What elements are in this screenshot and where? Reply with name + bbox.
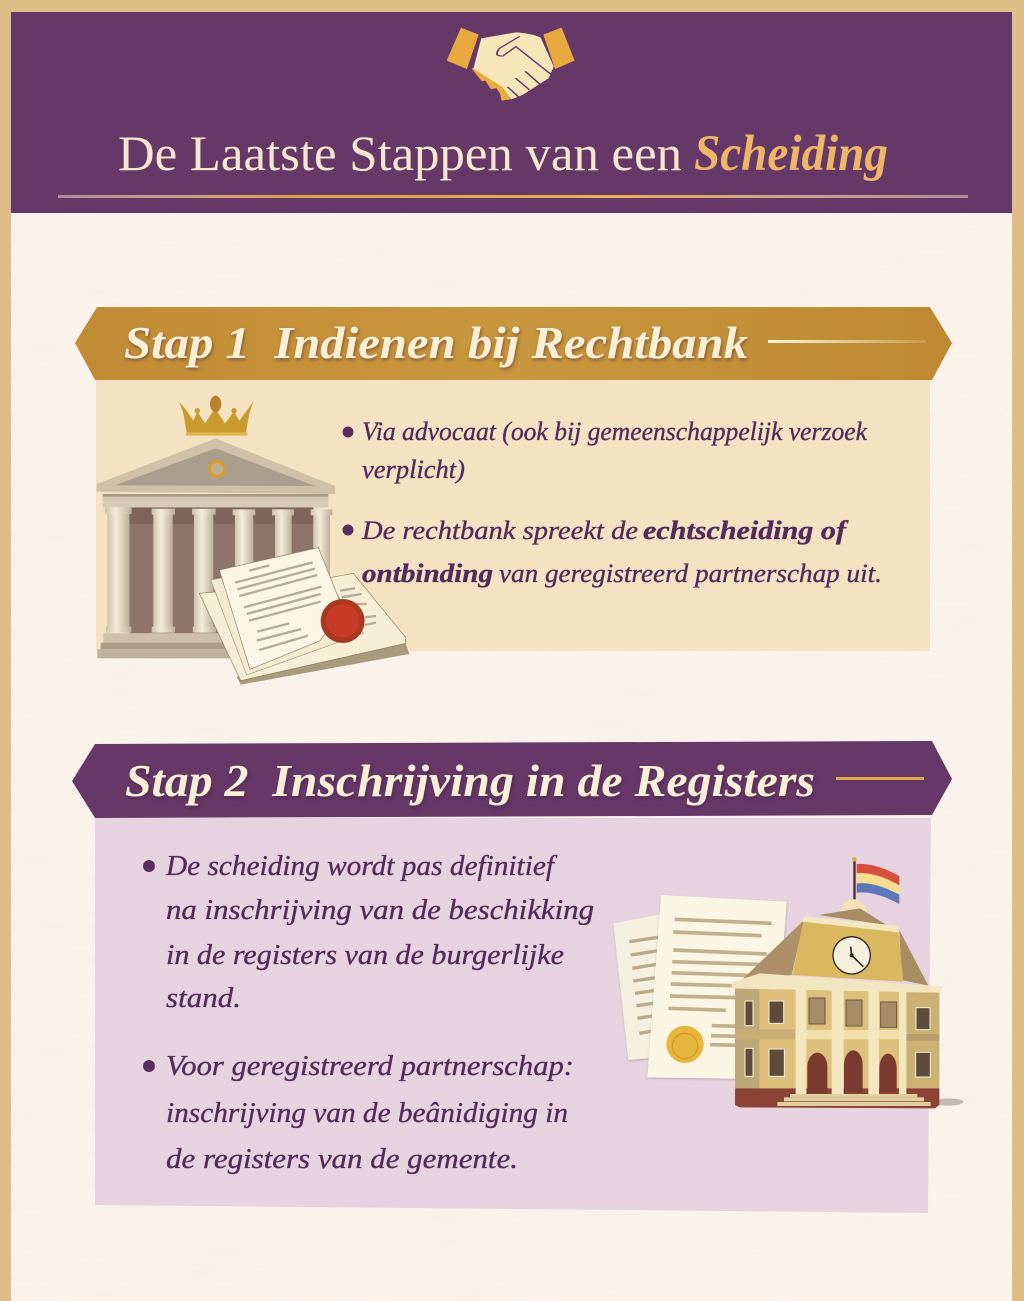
title: Scheiding [694, 126, 888, 182]
title: De Laatste Stappen van een [118, 125, 682, 181]
columns [796, 984, 906, 1095]
illustration: documents and town hall [613, 857, 963, 1108]
steps [777, 1094, 931, 1106]
step 2 bullets: stand. [166, 982, 241, 1014]
header band [11, 12, 1012, 213]
step 2 bullets: inschrijving van de beânidiging in [166, 1097, 568, 1129]
step 2 banner [72, 741, 952, 818]
step 1 bullets: ontbinding [362, 559, 493, 588]
icon: town hall [732, 899, 943, 1108]
doors [807, 1050, 897, 1093]
step 2 bullets [143, 850, 594, 1175]
step 1 banner [75, 307, 952, 380]
step 1 bullets [342, 417, 882, 588]
step 2 bullets: De scheiding wordt pas definitief [165, 850, 558, 882]
step 1 bullets: Via advocaat (ook bij gemeenschappelijk verzoek [362, 417, 867, 446]
panel: step 1 [75, 307, 952, 685]
step 2 bullets: na inschrijving van de beschikking [166, 894, 594, 926]
icon: crown [179, 396, 253, 436]
step 2 bullets: de registers van de gemente. [166, 1143, 518, 1175]
title underline [58, 195, 968, 198]
windows [745, 1001, 930, 1077]
step 1 bullets: De rechtbank spreekt de [361, 516, 638, 545]
icon: flag [852, 857, 899, 904]
step 2 bullets: in de registers van de burgerlijke [166, 939, 564, 971]
step 1 body [96, 380, 930, 651]
icon: courthouse [97, 438, 335, 658]
shadow [933, 1098, 963, 1106]
step 1 bullets: echtscheiding of [643, 516, 849, 545]
icon: handshake [447, 28, 575, 101]
step 2 body [95, 818, 931, 1213]
icon: sealed documents [199, 548, 409, 685]
step 2 banner: Stap 2 Inschrijving in de Registers [125, 755, 815, 806]
clock [833, 937, 870, 974]
step 1 bullets: van geregistreerd partnerschap uit. [499, 559, 882, 588]
illustration: courthouse with crown and sealed documents [97, 396, 409, 685]
step 1 bullets: verplicht) [362, 455, 465, 484]
icon: documents with gold seal [613, 895, 787, 1079]
step 1 banner: Stap 1 Indienen bij Rechtbank [124, 317, 748, 368]
step 2 bullets: Voor geregistreerd partnerschap: [166, 1050, 574, 1082]
panel: step 2 [72, 741, 963, 1213]
